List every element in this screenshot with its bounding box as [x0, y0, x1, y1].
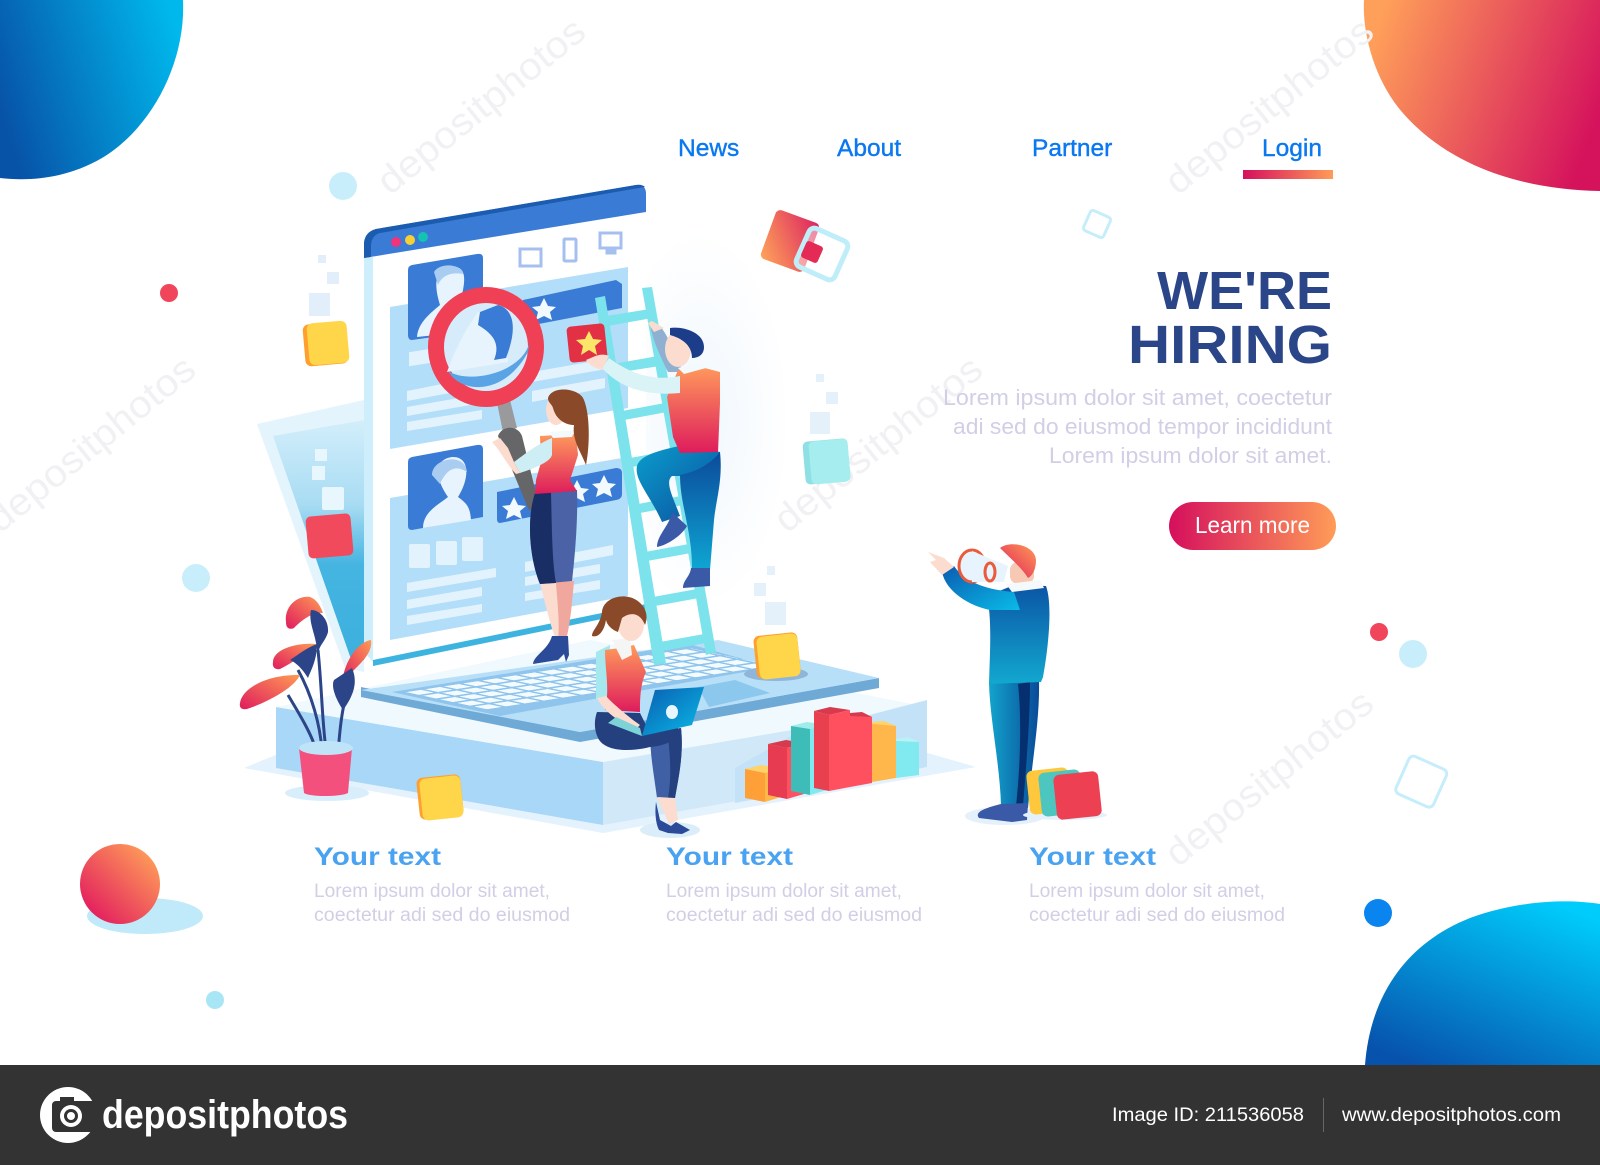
trousers: straight leg — [680, 452, 721, 570]
bar: red — [768, 740, 804, 799]
pointing hand — [928, 552, 954, 575]
title bar — [364, 185, 646, 258]
navigation: About — [837, 135, 901, 162]
vest — [605, 645, 646, 712]
heels — [533, 636, 569, 664]
thigh — [595, 712, 678, 750]
image id: Image ID: 211536058 — [1112, 1104, 1304, 1126]
avatar 2 — [408, 445, 483, 530]
caption 2 — [666, 843, 922, 926]
collar — [549, 430, 575, 438]
caption 3 — [1029, 843, 1285, 926]
pale squares above laptop cube — [754, 566, 786, 625]
watermarks: depositphotos — [766, 348, 991, 541]
site url: www.depositphotos.com — [1341, 1104, 1561, 1126]
footer bar — [0, 1065, 1600, 1165]
corner blob: top left — [0, 0, 183, 179]
heading: WE'RE — [1157, 261, 1332, 321]
learn more button — [1169, 502, 1336, 550]
soft glow behind window — [610, 230, 790, 610]
head and ponytail — [546, 395, 566, 425]
ladder — [595, 287, 716, 665]
caption 2: coectetur adi sed do eiusmod — [666, 905, 922, 926]
yellow cube front — [416, 774, 464, 821]
intro paragraph: adi sed do eiusmod tempor incididunt — [953, 414, 1332, 439]
head — [618, 607, 644, 641]
navigation: News — [678, 135, 739, 162]
vest — [535, 434, 578, 494]
jacket — [987, 585, 1049, 684]
trousers: bent leg — [637, 445, 720, 522]
magnifying glass — [436, 295, 537, 511]
sphere with shadow — [80, 844, 203, 934]
keyboard — [392, 644, 774, 716]
laptop base — [361, 640, 879, 742]
illustration: job search scene — [240, 185, 1107, 838]
heading — [1128, 261, 1332, 375]
back tablet — [257, 400, 364, 672]
logo wordmark: depositphotos — [102, 1093, 348, 1137]
caption 1: Lorem ipsum dolor sit amet, — [314, 881, 550, 902]
corner blob: top right — [1364, 0, 1600, 191]
man with megaphone — [928, 544, 1049, 825]
forearm — [597, 696, 640, 730]
caption 2: Your text — [666, 843, 794, 871]
platform block — [276, 640, 927, 825]
bar: second red — [850, 712, 872, 787]
profile card 2 — [390, 457, 628, 640]
icon: camera logo — [40, 1087, 96, 1143]
rating bar 2 — [497, 468, 622, 523]
intro paragraph: Lorem ipsum dolor sit amet, coectetur — [943, 385, 1332, 410]
watermarks: depositphotos — [369, 10, 594, 203]
corner blob: bottom right — [1365, 901, 1600, 1065]
intro paragraph — [943, 385, 1332, 468]
profile card 1 — [390, 267, 628, 449]
raised arm — [942, 566, 1020, 610]
megaphone — [959, 550, 1008, 582]
watermarks: depositphotos — [1157, 10, 1382, 203]
bar: teal — [791, 722, 827, 795]
bar chart — [735, 700, 927, 803]
navigation — [678, 135, 1333, 179]
arm — [514, 438, 552, 473]
caption 2: Lorem ipsum dolor sit amet, — [666, 881, 902, 902]
shoe — [978, 803, 1028, 822]
handle — [497, 400, 517, 432]
red star badge — [566, 323, 608, 363]
caption 1 — [314, 843, 570, 926]
caption 3: Lorem ipsum dolor sit amet, — [1029, 881, 1265, 902]
shirt — [596, 645, 610, 700]
head and collar — [1010, 562, 1034, 584]
shin — [650, 728, 682, 798]
caption 1: Your text — [314, 843, 442, 871]
navigation: Login — [1262, 135, 1322, 162]
login underline — [1243, 170, 1333, 179]
pot — [299, 748, 352, 796]
lens — [436, 295, 536, 399]
outlined squares — [1082, 209, 1448, 809]
potted plant — [240, 597, 371, 801]
bar: tall red — [814, 707, 850, 791]
block stack by man — [1023, 767, 1107, 820]
red cube on tablet — [305, 513, 354, 559]
bar: amber — [872, 721, 896, 782]
pale squares above teal cube — [810, 374, 838, 434]
collar — [678, 362, 706, 374]
watermarks — [0, 10, 1382, 875]
skirt — [530, 490, 577, 584]
rating bar 1 — [523, 280, 622, 327]
floating gradient square — [759, 209, 850, 282]
far arm — [650, 323, 683, 372]
browser window — [364, 185, 646, 666]
standing woman — [492, 390, 589, 664]
legs — [540, 581, 574, 640]
device icons — [520, 233, 621, 266]
leaves — [286, 597, 323, 629]
avatar 1 — [408, 254, 483, 340]
caption 3: coectetur adi sed do eiusmod — [1029, 905, 1285, 926]
near arm — [602, 358, 680, 394]
tablet squares — [315, 449, 327, 461]
small pale squares near cube — [309, 255, 339, 316]
watermarks: depositphotos — [1157, 682, 1382, 875]
small laptop — [642, 687, 704, 736]
stems — [288, 650, 345, 750]
sitting woman with laptop — [592, 596, 704, 838]
teal cube — [802, 438, 851, 485]
legs — [989, 680, 1039, 808]
decorative dots — [160, 172, 1427, 1009]
man climbing ladder — [586, 321, 721, 588]
intro paragraph: Lorem ipsum dolor sit amet. — [1049, 443, 1332, 468]
shoes — [657, 512, 687, 547]
bar: cyan — [896, 737, 919, 778]
vest — [667, 366, 720, 453]
navigation: Partner — [1032, 135, 1112, 162]
caption 3: Your text — [1029, 843, 1157, 871]
ground shadow — [244, 745, 976, 833]
yellow cube on laptop — [744, 632, 808, 681]
caption 1: coectetur adi sed do eiusmod — [314, 905, 570, 926]
heading: HIRING — [1128, 315, 1332, 375]
ankles and shoes — [657, 797, 678, 824]
learn more button: Learn more — [1195, 512, 1310, 538]
head — [665, 331, 691, 367]
touchpad — [698, 680, 770, 707]
yellow cube left — [302, 320, 350, 367]
bar: orange — [745, 765, 781, 802]
